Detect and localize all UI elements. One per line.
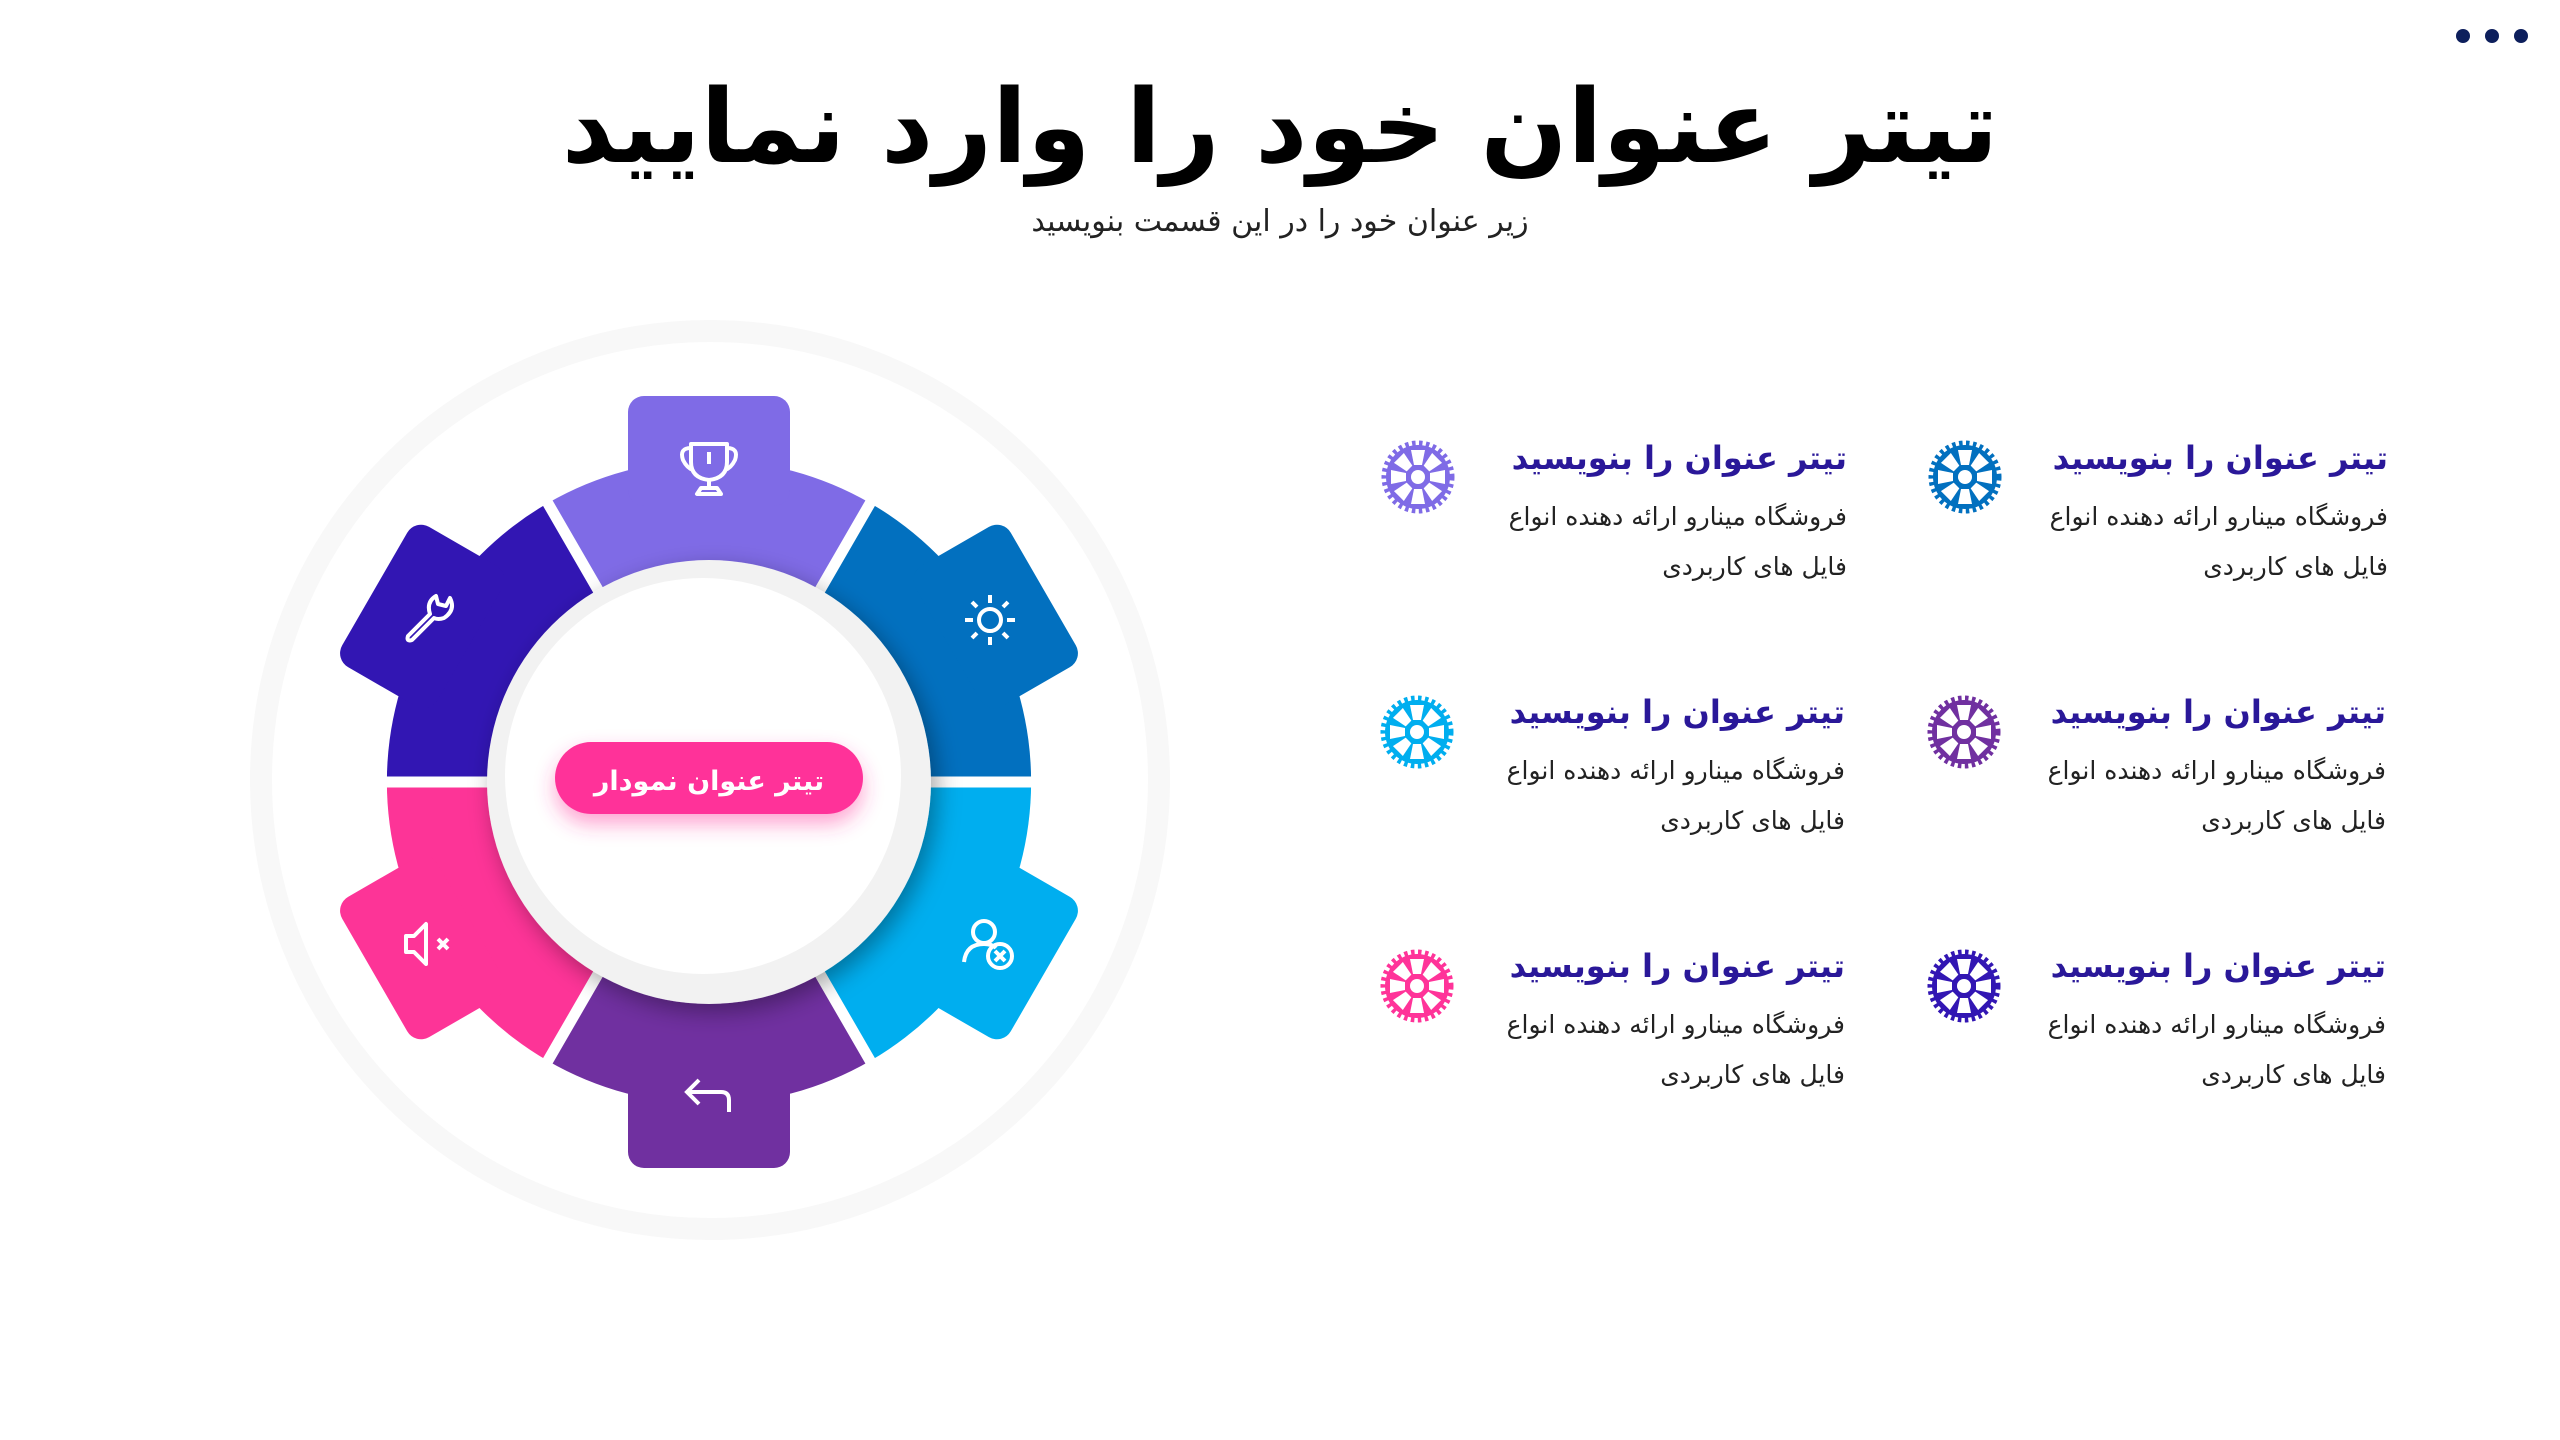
item 6: فروشگاه مینارو ارائه دهنده انواع <box>2048 1010 2386 1039</box>
icon: gear 3 <box>1383 698 1451 766</box>
icon: mute <box>406 924 448 964</box>
item 4: فروشگاه مینارو ارائه دهنده انواع <box>2048 756 2386 785</box>
item 4 <box>2048 693 2386 835</box>
item 1 <box>1509 439 1847 581</box>
item 2: فایل های کاربردی <box>2203 552 2388 581</box>
pill label <box>555 742 863 814</box>
center circle <box>487 560 931 1004</box>
title: تیتر عنوان خود را وارد نمایید <box>562 68 1998 187</box>
item 4: تیتر عنوان را بنویسید <box>2051 693 2386 731</box>
segment: lower right <box>628 643 1124 1114</box>
item 3: فروشگاه مینارو ارائه دهنده انواع <box>1507 756 1845 785</box>
background ring <box>250 320 1170 1240</box>
item 1: فایل های کاربردی <box>1662 552 1847 581</box>
item 1: تیتر عنوان را بنویسید <box>1512 439 1847 477</box>
item 5: فروشگاه مینارو ارائه دهنده انواع <box>1507 1010 1845 1039</box>
icon: gear 5 <box>1383 952 1451 1020</box>
icon: trophy <box>682 444 736 494</box>
item 3: تیتر عنوان را بنویسید <box>1510 693 1845 731</box>
gear chart <box>340 396 1078 1168</box>
item 3: فایل های کاربردی <box>1660 806 1845 835</box>
segment: upper left <box>294 450 790 921</box>
subtitle: زیر عنوان خود را در این قسمت بنویسید <box>1031 204 1529 239</box>
item 4: فایل های کاربردی <box>2201 806 2386 835</box>
icon: sun <box>965 595 1015 645</box>
item 5: تیتر عنوان را بنویسید <box>1510 947 1845 985</box>
icon: gear 4 <box>1930 698 1998 766</box>
icon: user remove <box>964 921 1012 968</box>
item 6: تیتر عنوان را بنویسید <box>2051 947 2386 985</box>
item 6: فایل های کاربردی <box>2201 1060 2386 1089</box>
icon: gear 2 <box>1931 443 1999 511</box>
segment: bottom <box>548 782 870 1168</box>
item 6 <box>2048 947 2386 1089</box>
segment: upper right <box>628 450 1124 921</box>
pill label: تیتر عنوان نمودار <box>592 766 824 797</box>
item 3 <box>1507 693 1845 835</box>
item 5: فایل های کاربردی <box>1660 1060 1845 1089</box>
icon: back arrow <box>687 1080 729 1112</box>
item 5 <box>1507 947 1845 1089</box>
menu dots <box>2456 29 2528 43</box>
item 2 <box>2050 439 2388 581</box>
item 2: تیتر عنوان را بنویسید <box>2053 439 2388 477</box>
icon: gear 6 <box>1930 952 1998 1020</box>
segment: lower left <box>294 643 790 1114</box>
item 1: فروشگاه مینارو ارائه دهنده انواع <box>1509 502 1847 531</box>
icon: wrench <box>408 596 452 640</box>
item 2: فروشگاه مینارو ارائه دهنده انواع <box>2050 502 2388 531</box>
segment: top <box>548 396 870 782</box>
icon: gear 1 <box>1384 443 1452 511</box>
